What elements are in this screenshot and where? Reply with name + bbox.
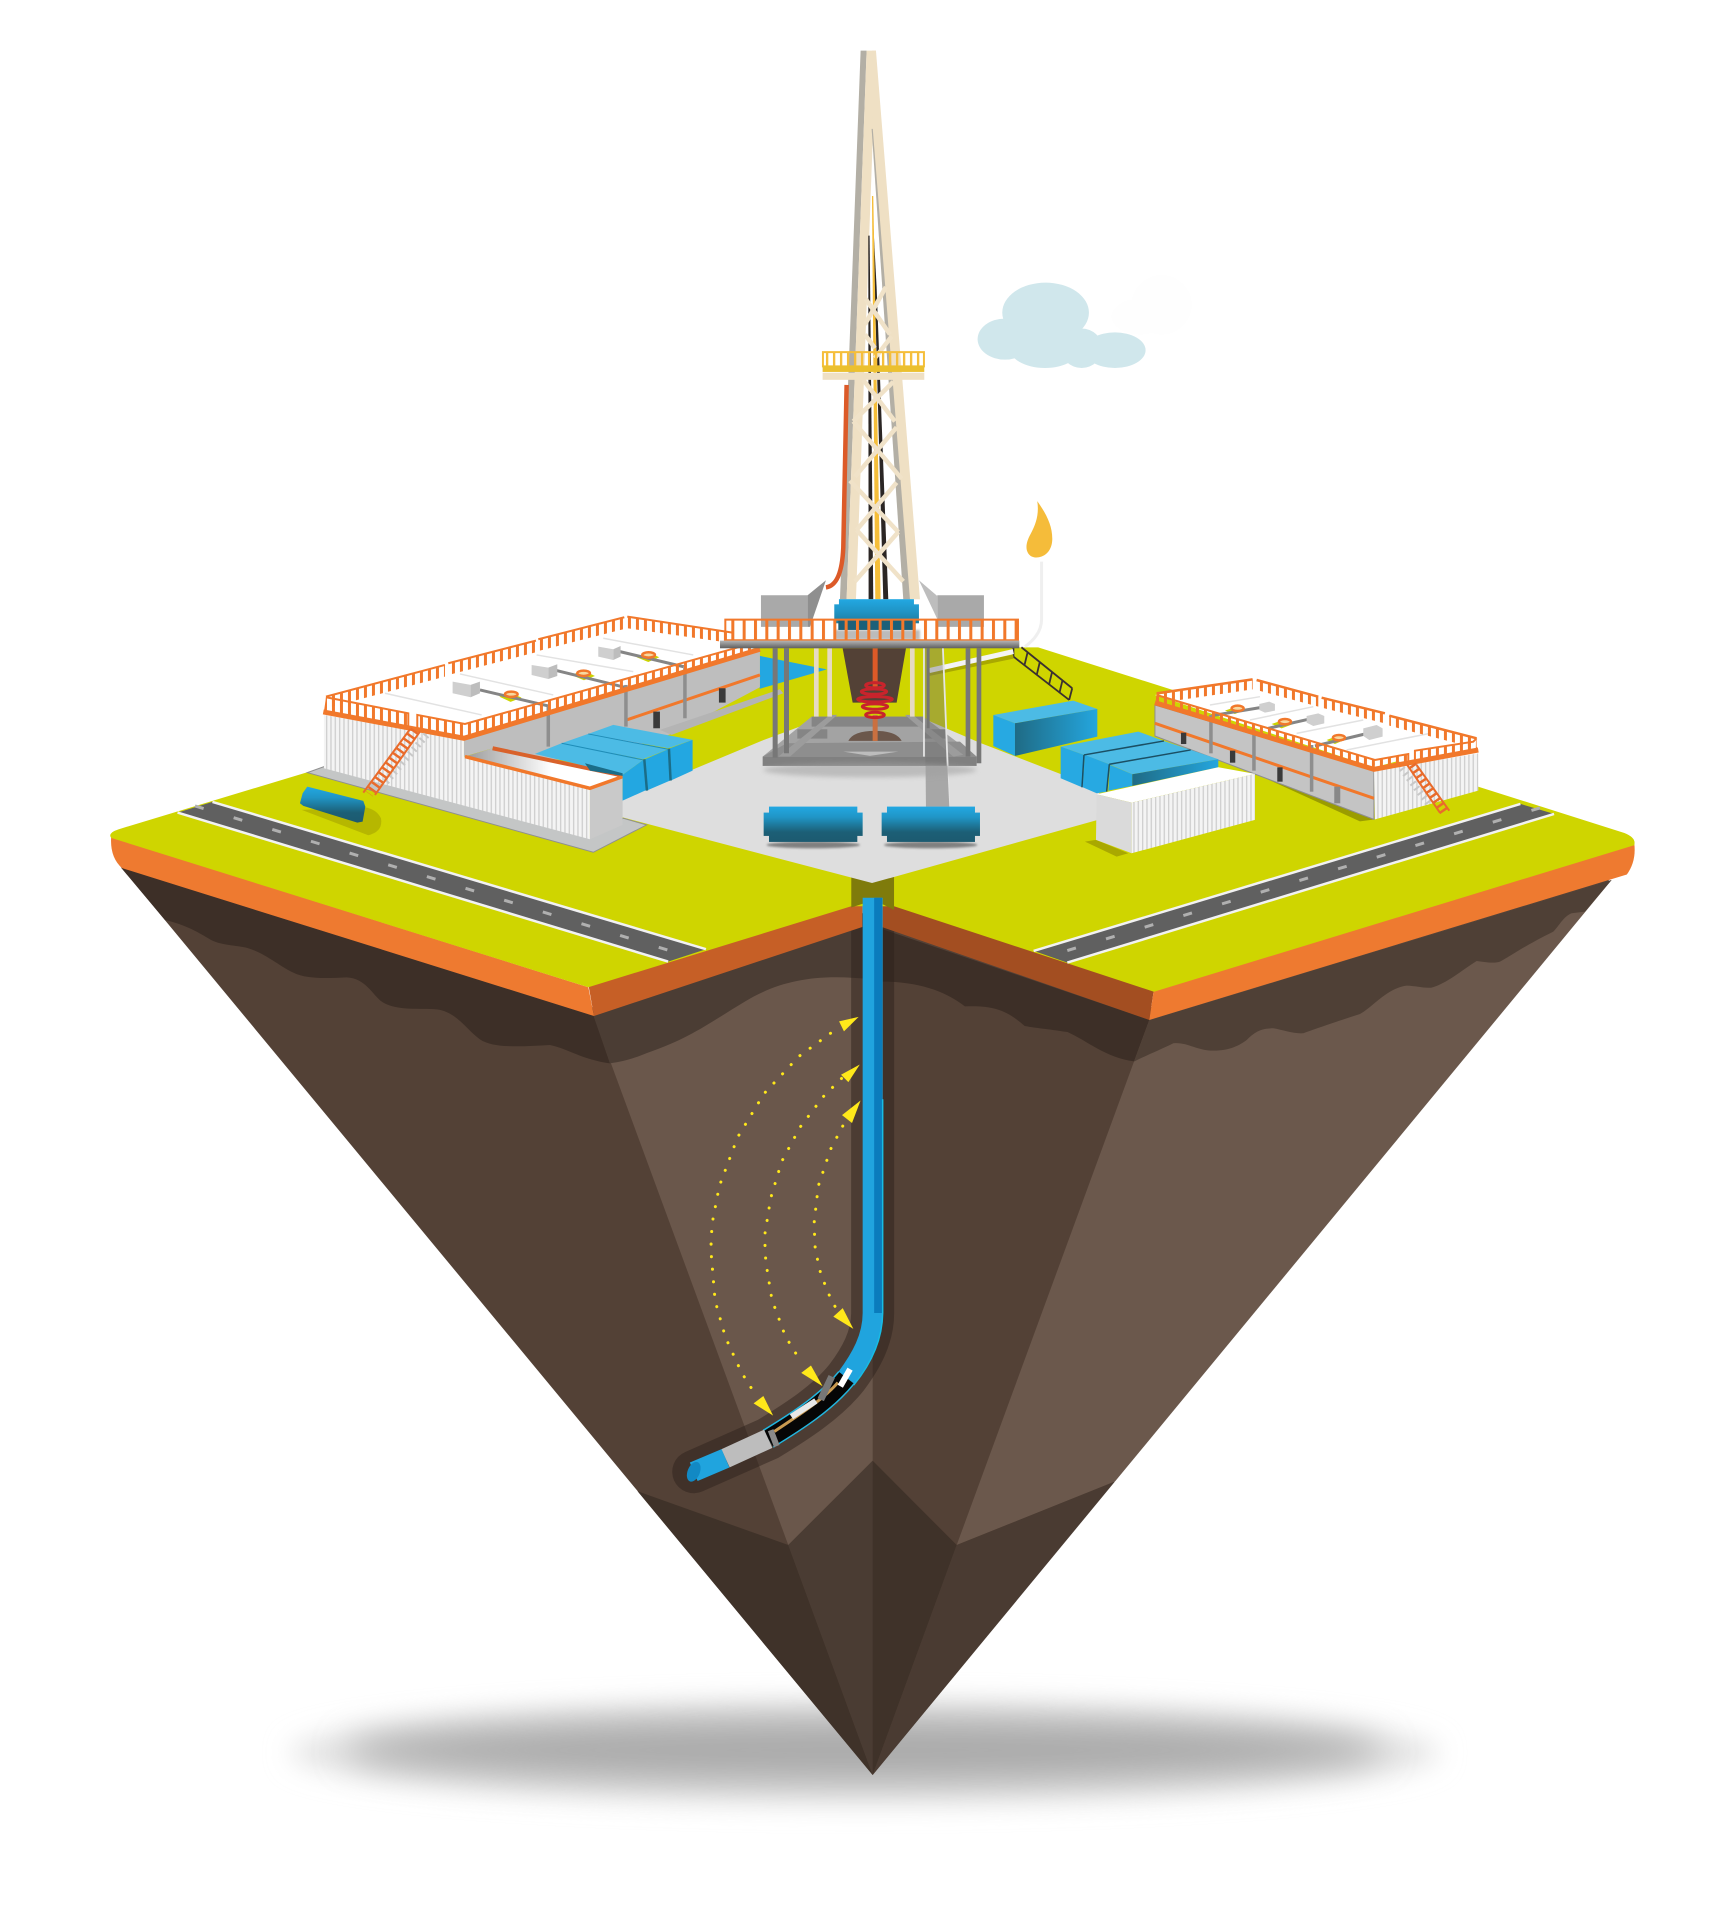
building shadow	[1240, 767, 1375, 821]
doors	[1181, 733, 1340, 803]
red spring	[858, 683, 892, 718]
collar ring	[771, 1430, 777, 1446]
flame	[1026, 501, 1052, 558]
pump unit 1	[453, 682, 548, 706]
beige rear legs	[814, 648, 915, 717]
brown funnel	[843, 648, 906, 703]
side beam	[923, 729, 947, 739]
vertical pipes	[548, 665, 685, 747]
cutaway tool section	[768, 1378, 846, 1439]
white container shadow	[1085, 840, 1128, 857]
orange edge right	[1149, 843, 1635, 1020]
blue containers left	[535, 725, 693, 801]
tool innards	[774, 1383, 838, 1431]
casing shaded strip	[874, 898, 882, 1313]
deck railing	[725, 619, 1018, 641]
transparent ramp	[924, 642, 949, 807]
roof lines	[1210, 697, 1430, 750]
left diagonal	[778, 715, 837, 757]
earth wedge	[119, 865, 1612, 1775]
substructure frame	[763, 717, 977, 757]
road left	[178, 802, 706, 962]
flare	[1025, 501, 1052, 647]
door	[653, 712, 660, 728]
front railing	[1155, 695, 1478, 769]
soil layer inner left	[594, 926, 873, 1063]
base slab	[307, 767, 647, 852]
beige right leg	[872, 51, 920, 599]
flare stack	[1025, 562, 1042, 647]
back railing	[1157, 679, 1477, 748]
left drum shadow	[767, 842, 860, 848]
cutaway cyan edge	[768, 1378, 846, 1439]
faint steam cloud	[1112, 275, 1192, 334]
pump unit 2	[1268, 713, 1324, 728]
front legs	[773, 648, 981, 763]
ladder	[1407, 765, 1449, 813]
outer dotted arc	[711, 1033, 831, 1394]
rig floor and substructure	[720, 619, 1019, 848]
long grey wall	[464, 649, 760, 762]
tool grey coupling	[821, 1376, 832, 1400]
ladder	[363, 729, 420, 795]
middle dotted arc	[765, 1078, 842, 1358]
arrowheads	[754, 1017, 861, 1416]
back railing	[326, 617, 733, 708]
grouped blue containers	[1061, 732, 1218, 793]
crown platform	[823, 352, 924, 380]
cross bracing	[850, 287, 903, 581]
ladder shadow	[1402, 768, 1428, 803]
long grey wall	[1155, 705, 1374, 819]
left lower rock facet	[638, 1491, 873, 1775]
microseismic arcs	[711, 1017, 861, 1416]
orange edge left	[111, 837, 594, 1016]
cutaway highlight	[840, 1369, 850, 1386]
wellbore halo	[694, 898, 873, 1472]
roof lines	[385, 638, 693, 715]
pump unit 1	[1212, 702, 1275, 716]
cross beam	[763, 742, 977, 757]
blue casing	[846, 898, 873, 1378]
end wall ribbed	[1374, 753, 1478, 819]
cloud	[978, 283, 1146, 368]
grey right leg	[872, 129, 911, 599]
inner left lower facet	[788, 1461, 873, 1775]
concrete pad	[617, 721, 1099, 883]
draw-works box right	[919, 580, 984, 627]
silhouette base	[119, 865, 1612, 1775]
inner left lit rock face	[594, 926, 873, 1545]
soil layer left	[121, 868, 610, 1063]
left drum	[764, 807, 863, 842]
white container	[1096, 767, 1255, 853]
wall stripe	[627, 675, 760, 720]
right drum	[882, 807, 980, 842]
soil layer right	[1134, 880, 1612, 1062]
roof	[324, 628, 760, 738]
front railing	[323, 645, 760, 739]
road right	[1034, 804, 1554, 963]
small tank shadow	[302, 807, 381, 835]
right outer rock face	[957, 880, 1612, 1545]
side beam	[797, 729, 827, 739]
tail opening	[684, 1460, 703, 1484]
roof	[1155, 680, 1478, 767]
ground shadow	[291, 1704, 1439, 1802]
ribbed wall	[324, 715, 590, 839]
pump unit 3	[598, 646, 683, 667]
drill line black right	[873, 212, 888, 599]
wellhead cellar	[848, 731, 902, 741]
soil layer inner right	[873, 926, 1149, 1061]
rear beam	[812, 717, 923, 727]
tool silver parts	[791, 1401, 816, 1417]
right lower rock facet	[873, 1482, 1115, 1775]
wall stripe	[1155, 723, 1374, 798]
stairs to rig deck	[1013, 647, 1072, 700]
inner dotted arc	[814, 1126, 843, 1309]
pump unit 3	[1315, 725, 1383, 746]
drill rod	[873, 648, 878, 687]
well slot	[851, 877, 894, 910]
top drive drum	[834, 599, 919, 629]
hose	[826, 385, 847, 587]
blue tank behind left building	[760, 656, 827, 689]
right diagonal	[905, 715, 963, 757]
orange edge inner right	[882, 899, 1154, 1020]
drill rod lower	[873, 715, 878, 741]
white conveyance tube	[929, 652, 1013, 674]
pipe	[684, 898, 883, 1484]
lower roof trim	[465, 757, 623, 788]
blue tail	[694, 1458, 725, 1472]
door	[719, 688, 726, 703]
base beam	[763, 757, 977, 766]
drum lower band	[838, 620, 916, 630]
pad shadow under rig	[763, 763, 977, 777]
silver collar	[725, 1439, 768, 1458]
orange edge inner left	[588, 899, 862, 1016]
pump unit 2	[532, 664, 625, 687]
green land surface	[110, 647, 1635, 992]
single blue container	[993, 701, 1097, 756]
vertical pipes	[1211, 715, 1312, 792]
inner right lower facet	[873, 1461, 957, 1775]
draw-works box left	[761, 580, 826, 627]
drill string yellow	[872, 196, 881, 599]
deck soft shadow	[835, 630, 920, 640]
lower roof trim	[493, 748, 623, 776]
grey left leg	[840, 51, 867, 599]
small tank	[300, 787, 365, 823]
rig deck	[720, 641, 1019, 648]
end wall	[590, 777, 623, 839]
centre mark	[843, 752, 898, 756]
drill line black	[868, 236, 873, 599]
beige left leg	[847, 51, 876, 599]
right building	[1155, 679, 1478, 821]
right drum shadow	[884, 842, 977, 848]
land slab edges	[111, 837, 1635, 1020]
service walkway	[660, 689, 783, 735]
derrick tower	[761, 51, 984, 629]
ladder shadow	[383, 735, 427, 785]
lower roof	[465, 748, 623, 787]
left building	[300, 617, 783, 852]
blue containers right	[993, 701, 1255, 857]
casing cyan edge	[854, 1099, 883, 1385]
